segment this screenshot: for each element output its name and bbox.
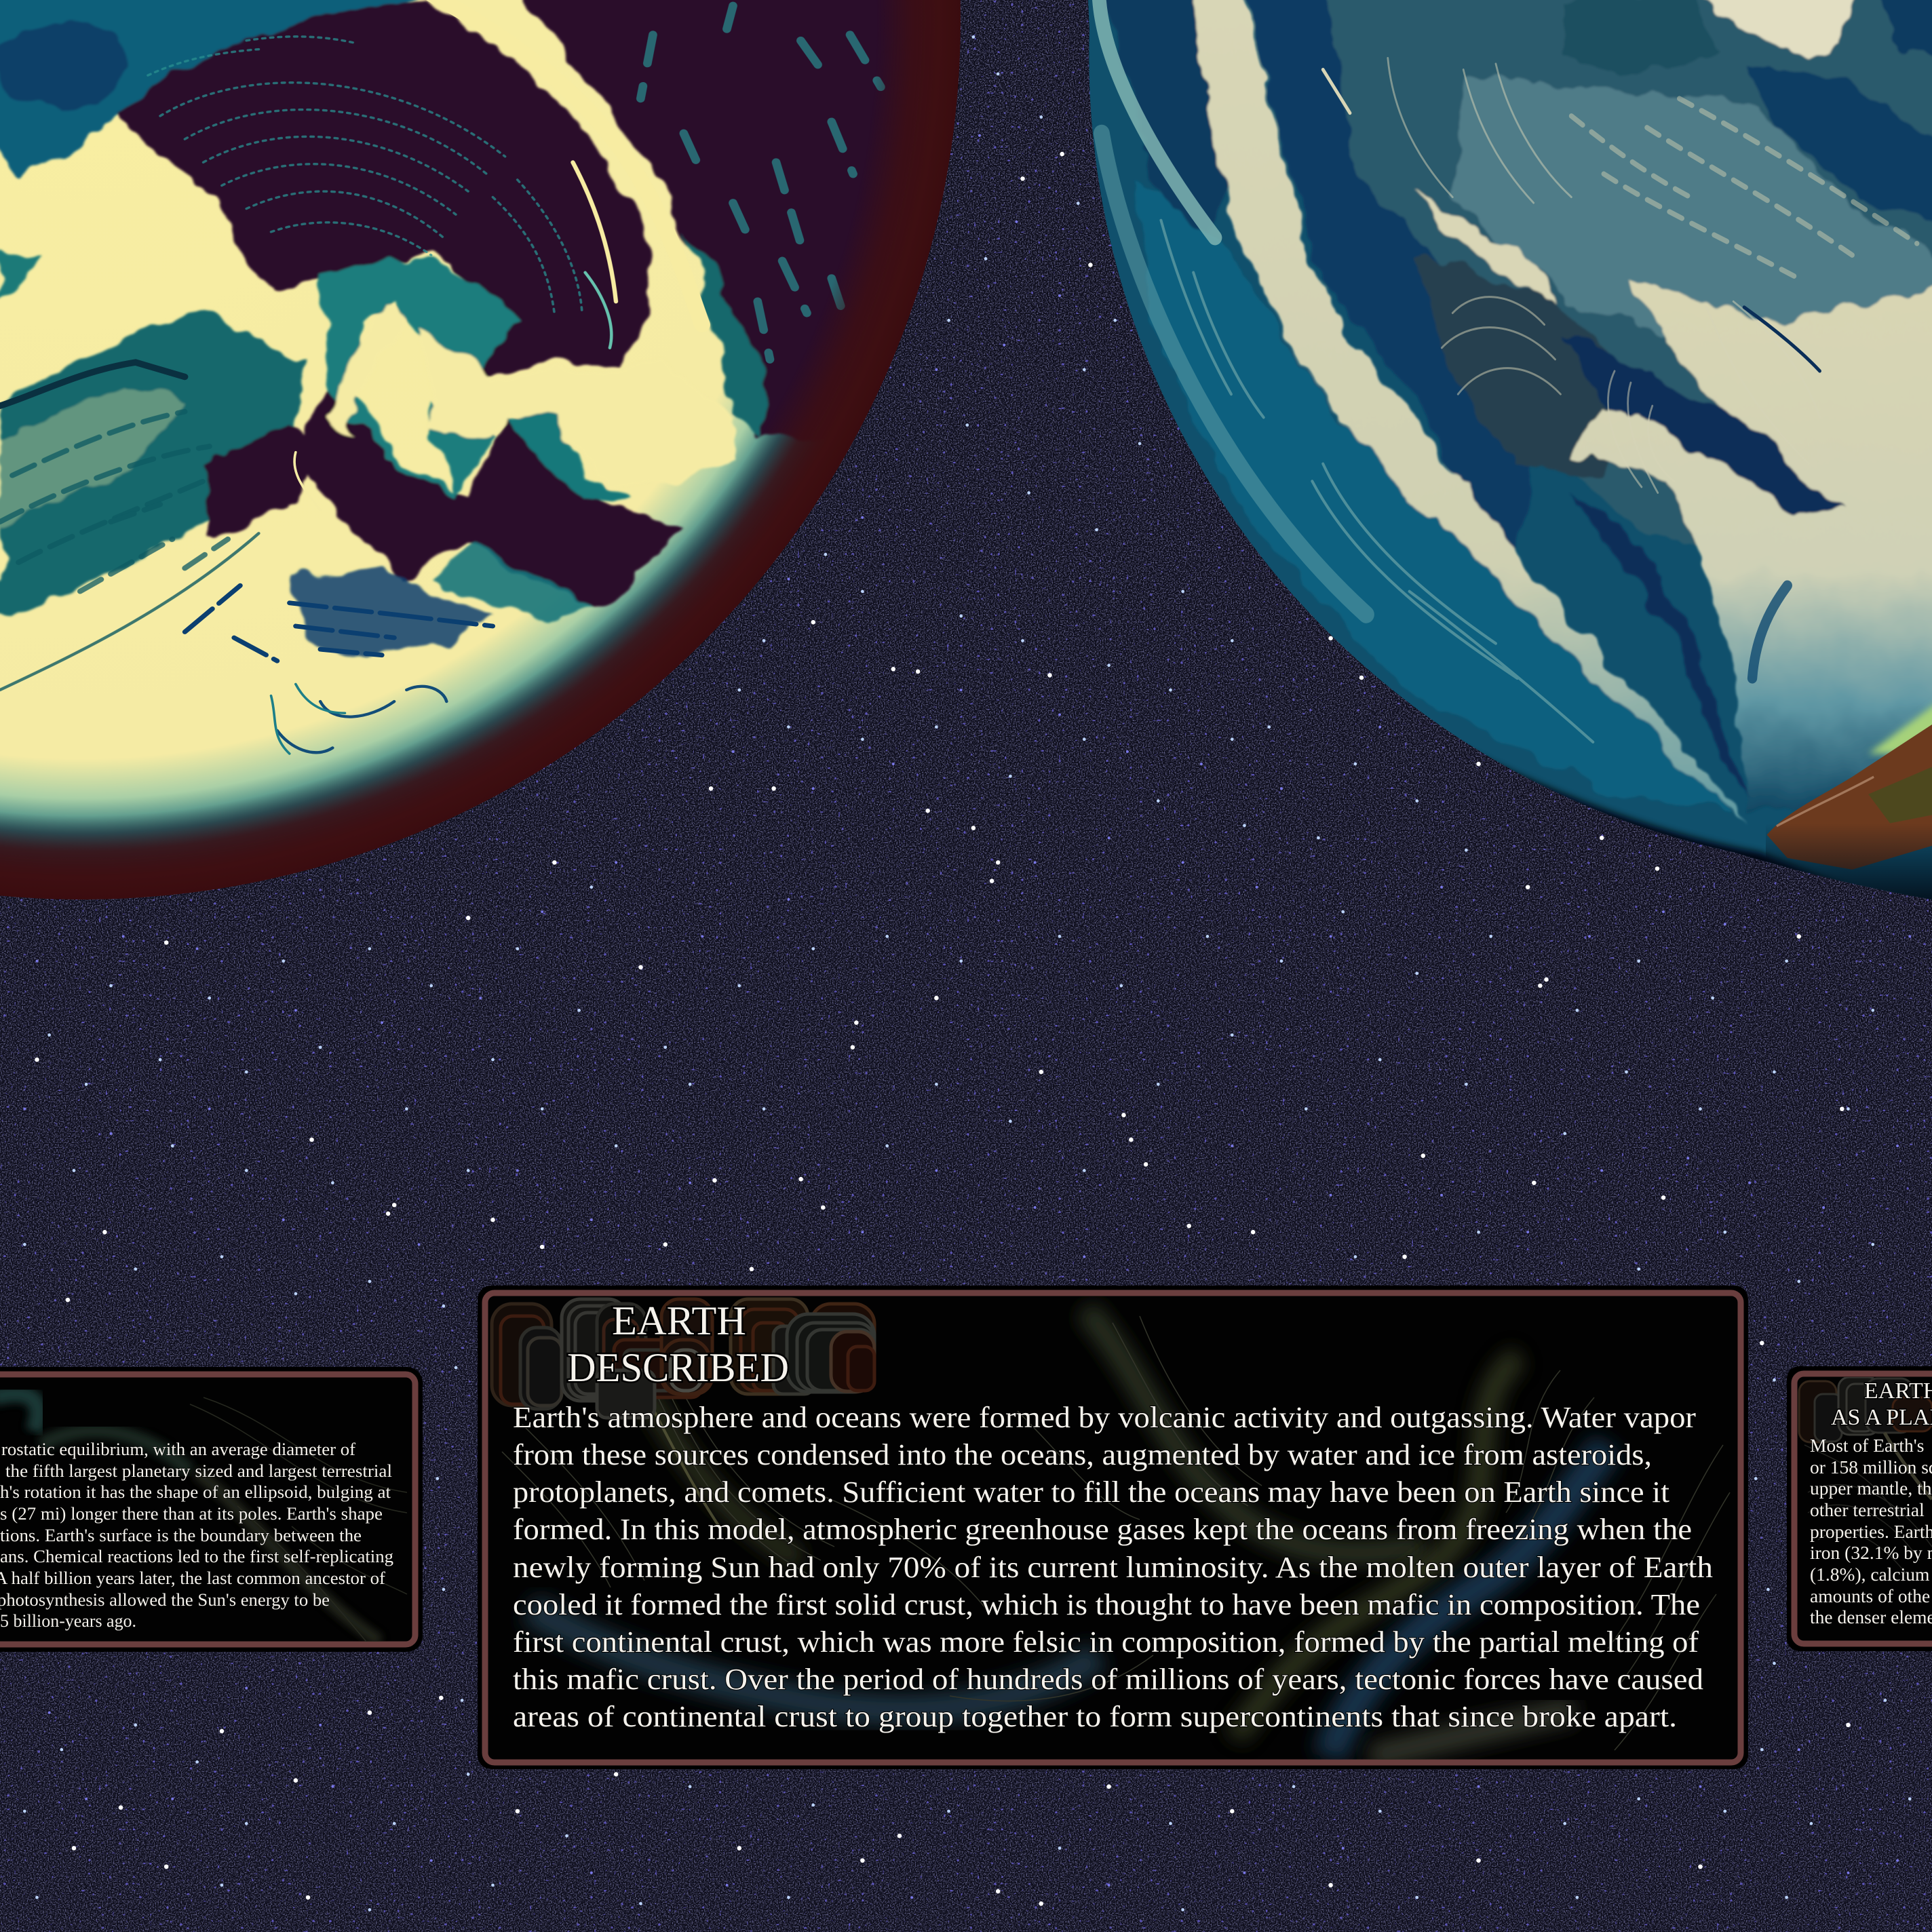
- panel text: photosynthesis allowed the Sun's energy to be: [0, 1590, 330, 1610]
- body text: [513, 1401, 1713, 1733]
- body text: first continental crust, which was more felsic in composition, formed by the partial melting of: [513, 1625, 1699, 1659]
- body text: this mafic crust. Over the period of hundreds of millions of years, tectonic forces have caused: [513, 1663, 1703, 1696]
- body text: Most of Earth's: [1810, 1435, 1924, 1456]
- panel text: [0, 1440, 393, 1631]
- panel text: the fifth largest planetary sized and largest terrestrial: [5, 1461, 392, 1481]
- panel frame: [478, 1286, 1748, 1769]
- panel: earth as a planet (right, cropped): [1787, 1366, 1932, 1651]
- body text: areas of continental crust to group together to form supercontinents that since broke apart.: [513, 1700, 1677, 1733]
- body text: the denser eleme: [1810, 1606, 1932, 1627]
- body text: properties. Earth: [1810, 1521, 1932, 1542]
- panel: earth described (center): [478, 1286, 1748, 1769]
- panel text: 5 billion-years ago.: [0, 1611, 136, 1631]
- body text: formed. In this model, atmospheric greenhouse gases kept the oceans from freezing when the: [513, 1513, 1692, 1546]
- heading: [567, 1298, 789, 1390]
- panel frame: [0, 1372, 418, 1647]
- body text: newly forming Sun had only 70% of its current luminosity. As the molten outer layer of Earth: [513, 1551, 1713, 1584]
- header art and waves: [1799, 1377, 1932, 1574]
- body text: other terrestrial: [1810, 1499, 1925, 1520]
- panel text: rostatic equilibrium, with an average diameter of: [1, 1440, 355, 1459]
- body text: protoplanets, and comets. Sufficient water to fill the oceans may have been on Earth since it: [513, 1475, 1669, 1509]
- body text: Earth's atmosphere and oceans were formed by volcanic activity and outgassing. Water vapor: [513, 1401, 1696, 1434]
- heading: [1831, 1378, 1932, 1430]
- body text: from these sources condensed into the oceans, augmented by water and ice from asteroids,: [513, 1438, 1652, 1471]
- planet: left earth in yellow and teal: [0, 0, 986, 900]
- panel text: A half billion years later, the last common ancestor of: [0, 1568, 385, 1588]
- panel text: s (27 mi) longer there than at its poles. Earth's shape: [0, 1504, 383, 1524]
- header art: layered arches: [492, 1299, 874, 1418]
- heading: DESCRIBED: [567, 1345, 789, 1390]
- panel text: ans. Chemical reactions led to the first self-replicating: [0, 1547, 393, 1566]
- panel text: tions. Earth's surface is the boundary between the: [0, 1526, 362, 1545]
- panel: earth overview (left, cropped): [0, 1372, 418, 1647]
- panel text: h's rotation it has the shape of an ellipsoid, bulging at: [0, 1482, 391, 1502]
- panel background waves: [0, 1393, 407, 1642]
- panel frame: [1787, 1366, 1932, 1651]
- planet: right earth in blue and cream: [1079, 0, 1932, 927]
- body text: amounts of othe: [1810, 1585, 1930, 1606]
- body text: cooled it formed the first solid crust, which is thought to have been mafic in composition. The: [513, 1588, 1700, 1621]
- panel background waves: [502, 1309, 1730, 1757]
- body text: [1810, 1435, 1932, 1627]
- heading: EARTH: [612, 1298, 746, 1343]
